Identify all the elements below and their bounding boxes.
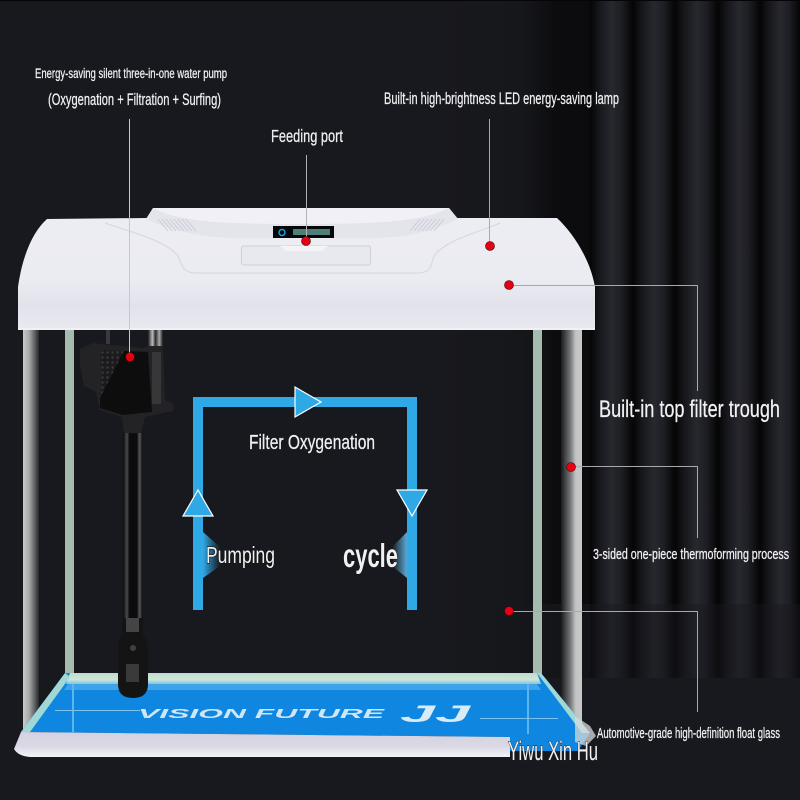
- pump title: Energy-saving silent three-in-one water pump: [35, 66, 227, 81]
- label: pumping: Pumping: [206, 542, 275, 568]
- arrow down: [397, 490, 427, 516]
- pipe glow left: [203, 532, 220, 578]
- trough leader line: [509, 286, 698, 391]
- floor print: Vision Future: VISION FUTURE: [138, 706, 385, 721]
- lid vents: [158, 219, 444, 231]
- pump intake: [118, 618, 148, 698]
- callout: thermoforming: [566, 462, 789, 563]
- lid top panel: [146, 208, 458, 238]
- thermoforming marker: [566, 462, 576, 472]
- LED marker: [486, 242, 494, 250]
- float glass marker: [504, 606, 514, 616]
- floor print: Vision Future: [138, 701, 472, 728]
- pump channel highlight: [152, 352, 161, 404]
- callout: LED lamp: [384, 90, 619, 250]
- tank floor: [21, 673, 590, 751]
- pump marker: [126, 352, 134, 362]
- thermoforming leader line: [571, 466, 698, 538]
- aquarium tank: [14, 208, 596, 757]
- arrow right: [295, 387, 321, 417]
- feeding port label: Feeding port: [271, 126, 343, 146]
- feeding port hatch: [242, 246, 370, 265]
- lid contour line: [105, 223, 500, 273]
- blue circulation pipe: [198, 402, 412, 610]
- callout: float glass: [504, 606, 780, 742]
- arrow up: [183, 490, 213, 516]
- lid body: [18, 218, 595, 329]
- label: cycle: cycle: [343, 537, 398, 574]
- white base tray: [14, 732, 510, 757]
- pump body: [80, 343, 174, 433]
- circulation diagram: [183, 387, 427, 610]
- pump dark housing: [100, 351, 152, 415]
- callout: water pump: [35, 66, 227, 362]
- pump outlet pipes: [106, 330, 163, 352]
- feeding port marker: [302, 236, 310, 246]
- callout: top filter trough: [504, 280, 780, 423]
- watermark: Yiwu Xin Hu: Yiwu Xin Hu: [508, 736, 598, 766]
- pump subtitle: (Oxygenation + Filtration + Surfing): [48, 91, 221, 109]
- float glass leader line: [509, 612, 698, 712]
- trough marker: [504, 280, 514, 290]
- lid raised section: [146, 208, 458, 240]
- corner glare: [575, 716, 596, 746]
- floor print: Vision Future: JJ: [400, 701, 472, 728]
- LED label: Built-in high-brightness LED energy-saving lamp: [384, 90, 619, 108]
- water pump: [80, 330, 174, 698]
- pump leader line: [128, 119, 130, 357]
- callout: feeding port: [271, 126, 343, 246]
- label: filter oxygenation: Filter Oxygenation: [249, 432, 375, 454]
- pipe glow right: [392, 532, 407, 578]
- glass posts: [23, 330, 582, 735]
- feeding port leader line: [306, 155, 308, 241]
- logo badge: [273, 226, 334, 238]
- pump tube: [123, 433, 143, 638]
- LED leader line: [488, 119, 490, 246]
- pump mesh panel: [101, 350, 124, 398]
